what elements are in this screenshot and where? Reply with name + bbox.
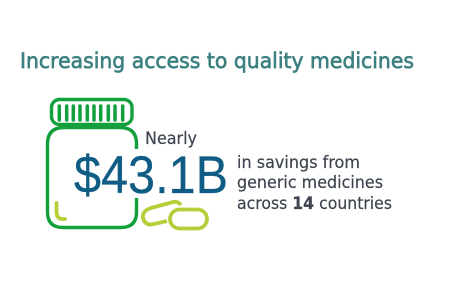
bottle body [48,128,136,228]
cap ridges [59,106,123,120]
pill two [170,210,207,228]
icon: pills [143,202,207,228]
title: Increasing access to quality medicines [20,49,414,73]
big number: $43.1B [74,146,228,205]
bottle cap [52,100,132,124]
savings description: in savings from [237,153,360,172]
savings description: across 14 countries [237,194,392,213]
pill one [143,202,181,224]
icon: medicine bottle [48,100,136,228]
savings description [237,153,392,213]
bottle highlight [56,203,65,219]
savings description: generic medicines [237,173,383,192]
nearly label: Nearly [145,129,197,149]
